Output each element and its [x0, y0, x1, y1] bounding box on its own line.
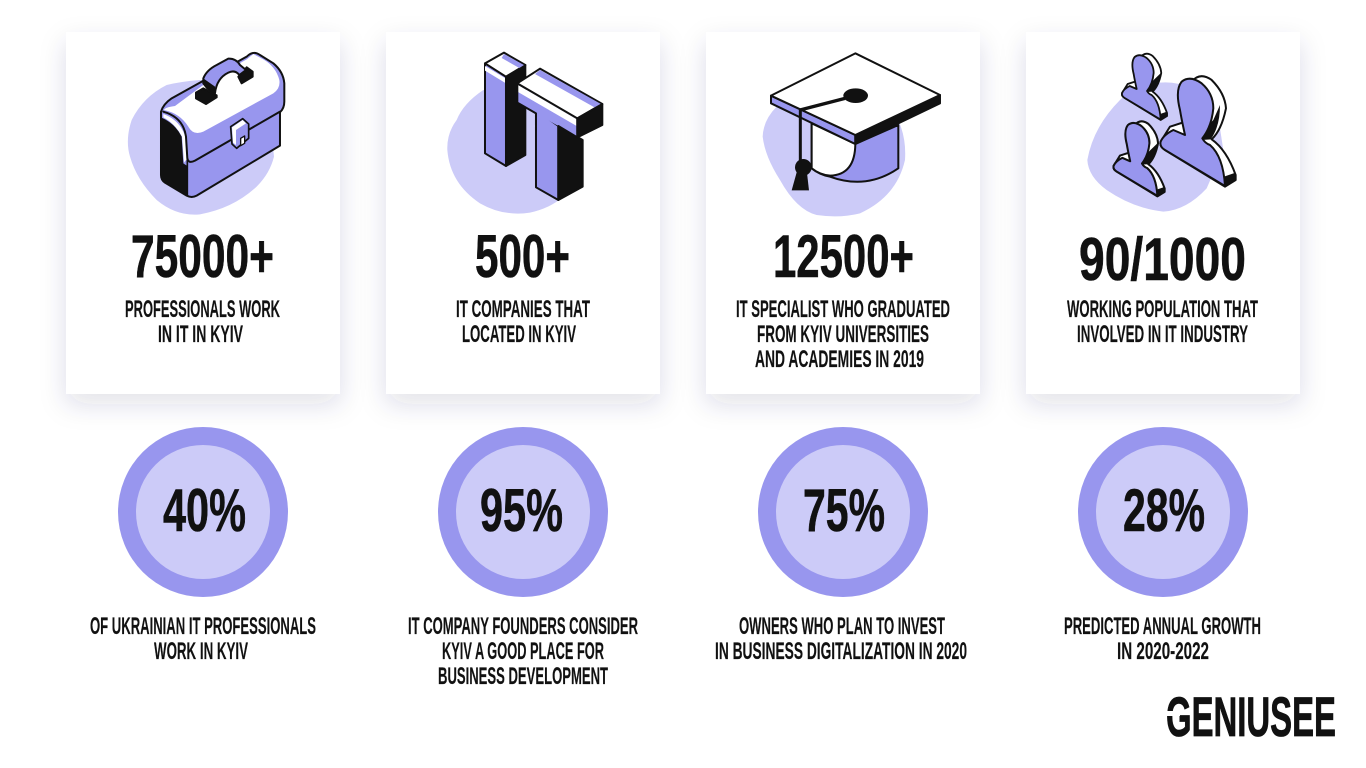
caption: 95% [408, 613, 638, 690]
panel: companies [386, 32, 660, 394]
caption: working population [1067, 296, 1258, 348]
caption: 28%: IN 2020-2022 [1117, 638, 1209, 665]
panel: graduates [706, 32, 980, 394]
stat: 90/1000: 90/1000 [1079, 226, 1246, 293]
caption: 95%: IT COMPANY FOUNDERS CONSIDER [408, 613, 638, 640]
caption: companies [456, 296, 590, 348]
panel: professionals [66, 32, 340, 394]
caption: professionals: IN IT IN KYIV [158, 321, 243, 348]
icon: graduation cap [763, 53, 940, 216]
icon: people [1087, 54, 1236, 212]
stat: 500+: 500+ [475, 223, 570, 290]
panel: working population [1026, 32, 1300, 394]
caption: 28% [1064, 613, 1261, 665]
caption: 75%: IN BUSINESS DIGITALIZATION IN 2020 [715, 638, 967, 665]
caption: 95%: KYIV A GOOD PLACE FOR [442, 638, 604, 665]
icon: IT letters [447, 53, 602, 214]
caption: 95%: BUSINESS DEVELOPMENT [438, 663, 608, 690]
person: large [1160, 76, 1236, 187]
donut stat: 95% [438, 427, 608, 597]
icon: briefcase [128, 53, 284, 215]
caption: 40%: WORK IN KYIV [154, 638, 248, 665]
caption: companies: LOCATED IN KYIV [462, 321, 576, 348]
caption: 40% [90, 613, 316, 665]
donut stat: 40% [118, 427, 288, 597]
caption: graduates [736, 296, 950, 373]
stat: 12500+: 12500+ [773, 223, 914, 290]
caption: graduates: FROM KYIV UNIVERSITIES [757, 321, 929, 348]
donut stat: 28% [1078, 427, 1248, 597]
person: lower small [1113, 121, 1165, 196]
donut stat: 40%: 40% [163, 477, 246, 544]
caption: 75%: OWNERS WHO PLAN TO INVEST [739, 613, 945, 640]
caption: professionals [125, 296, 280, 348]
donut stat: 75%: 75% [803, 477, 885, 544]
donut stat: 75% [758, 427, 928, 597]
donut stat: 28%: 28% [1123, 477, 1205, 544]
caption: graduates: AND ACADEMIES IN 2019 [755, 346, 924, 373]
caption: graduates: IT SPECIALIST WHO GRADUATED [736, 296, 950, 323]
stat: 75000+: 75000+ [131, 223, 274, 290]
donut stat: 95%: 95% [480, 477, 563, 544]
caption: professionals: PROFESSIONALS WORK [125, 296, 280, 323]
caption: companies: IT COMPANIES THAT [456, 296, 590, 323]
person: top small [1122, 54, 1167, 120]
caption: 75% [715, 613, 967, 665]
caption: 40%: OF UKRAINIAN IT PROFESSIONALS [90, 613, 316, 640]
